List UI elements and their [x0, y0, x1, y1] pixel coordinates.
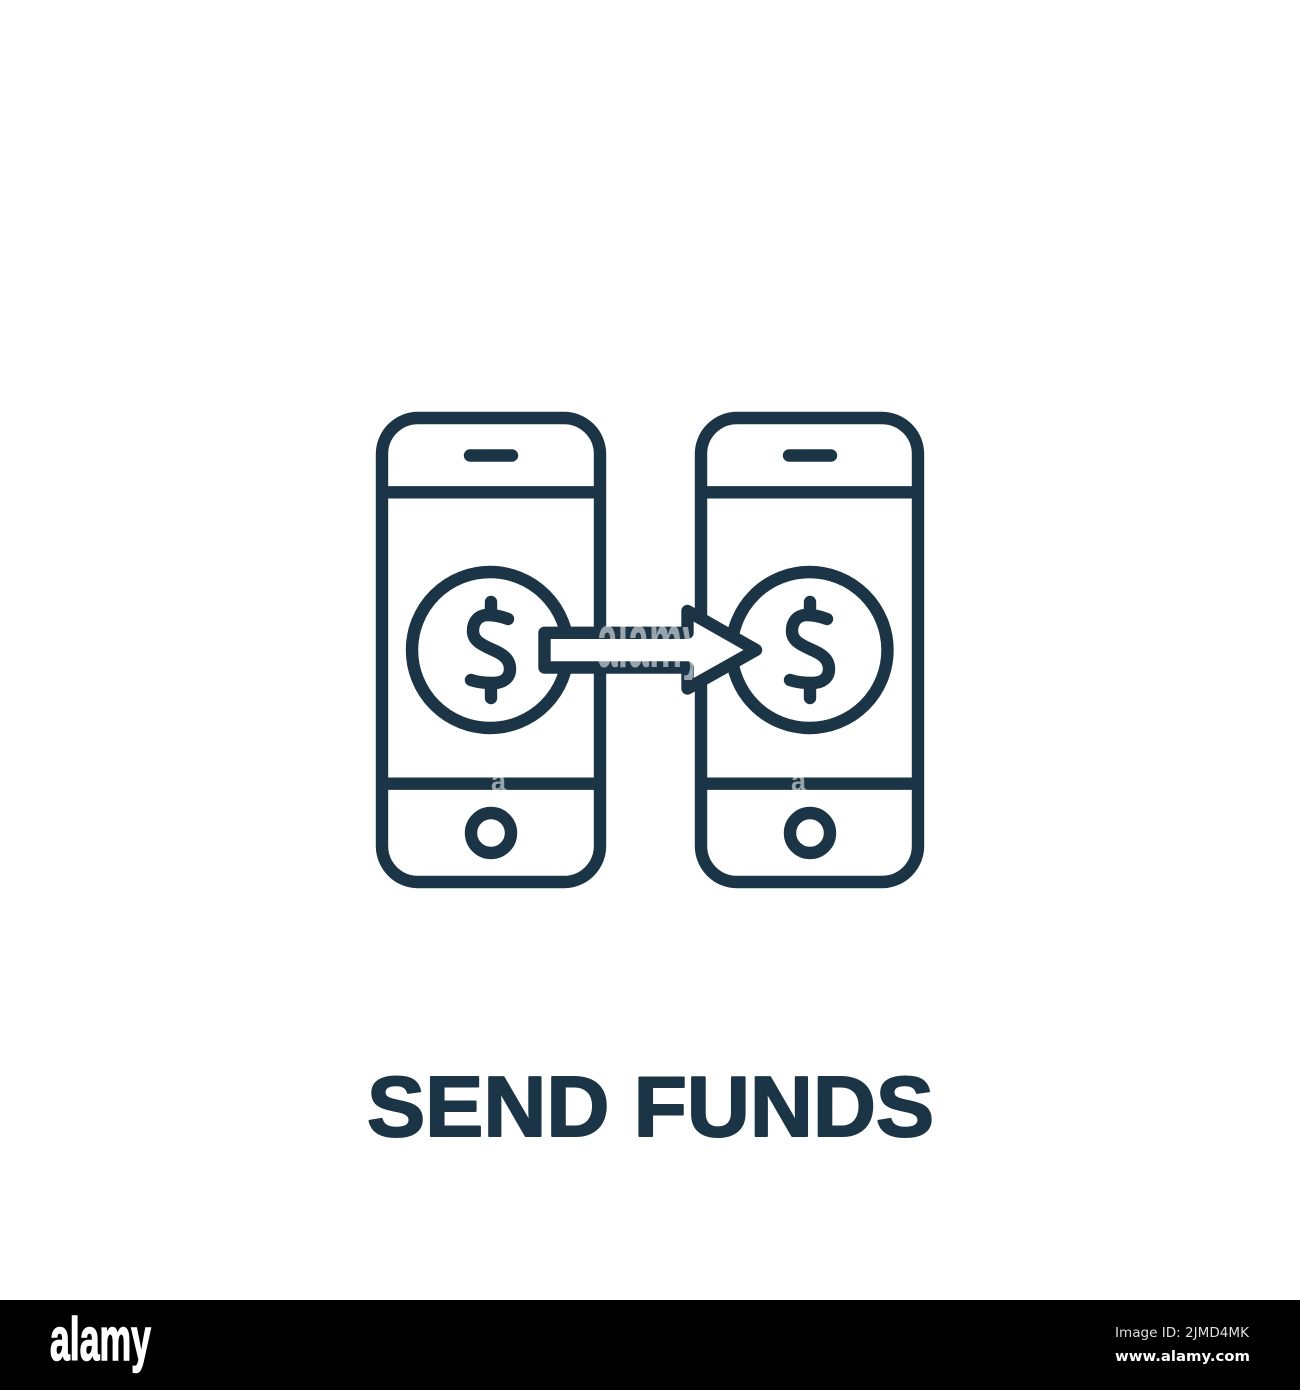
icon: send funds phones with arrow [382, 418, 918, 882]
image id: Image ID: 2JMD4MK [1115, 1325, 1250, 1341]
watermark fragment on left phone divider: a [491, 765, 506, 798]
icon: right phone [701, 418, 918, 882]
footer band [0, 1300, 1300, 1390]
icon: left phone [382, 418, 600, 882]
arrow [544, 611, 756, 688]
icon: send funds phones with arrow: alamy [597, 599, 703, 684]
website: www.alamy.com [1115, 1349, 1250, 1365]
watermark fragment on right phone divider: a [791, 765, 806, 798]
footer logo: alamy [50, 1306, 151, 1373]
title: SEND FUNDS [367, 1060, 934, 1155]
